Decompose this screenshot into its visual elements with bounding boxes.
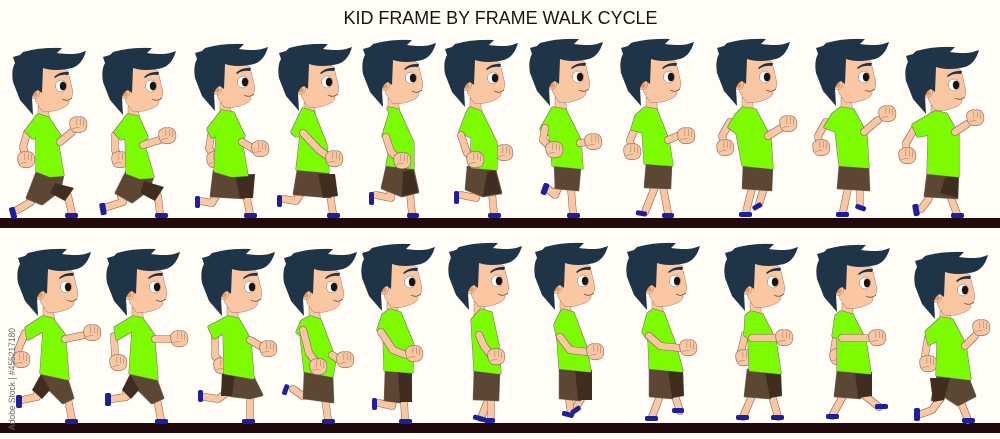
- kid frame 15: [281, 249, 357, 424]
- title: KID FRAME BY FRAME WALK CYCLE: [344, 8, 658, 28]
- kid frame 13: [105, 249, 188, 424]
- ground bar: bottom row: [0, 423, 1000, 433]
- kid frame 21: [816, 245, 890, 419]
- kid frame 4: [277, 44, 352, 218]
- kid frame 9: [716, 39, 797, 217]
- kid frame 6: [444, 40, 518, 218]
- kid frame 3: [194, 44, 269, 218]
- kid frame 11: [899, 47, 984, 218]
- kid frame 7: [529, 39, 603, 218]
- ground bar: top row: [0, 218, 1000, 228]
- kid frame 22: [914, 252, 990, 423]
- kid frame 1: [9, 48, 87, 220]
- kid frame 17: [448, 243, 522, 423]
- kid frame 16: [361, 244, 435, 424]
- kid frame 2: [99, 48, 176, 218]
- kid frame 20: [724, 244, 798, 420]
- kid frame 14: [198, 249, 277, 424]
- stock id text: Adobe Stock | #455217180: [7, 328, 18, 430]
- kid frame 8: [620, 39, 695, 218]
- kid frame 19: [626, 243, 700, 421]
- kid frame 12: [13, 249, 101, 424]
- kid frame 10: [813, 39, 896, 217]
- kid frame 5: [362, 40, 436, 218]
- kid frame 18: [534, 243, 608, 418]
